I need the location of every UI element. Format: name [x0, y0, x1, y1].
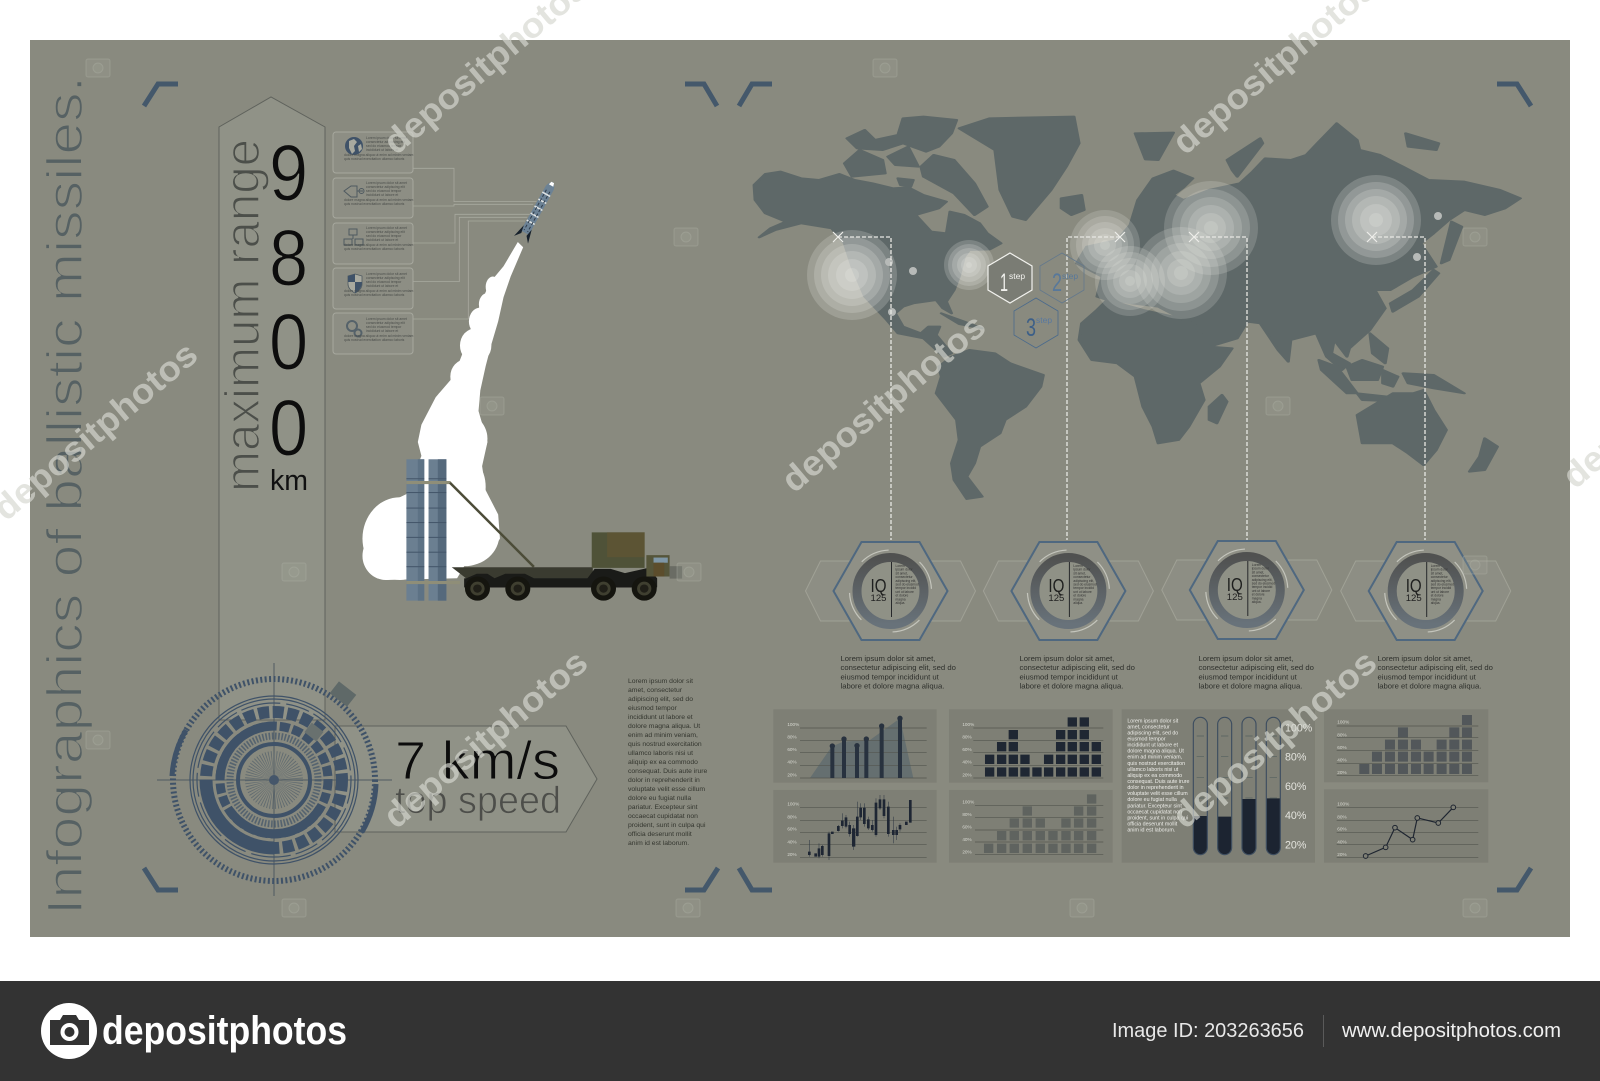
IQ widget 2: magna: [1073, 597, 1084, 601]
watermarks: depositphotos: [774, 306, 993, 500]
IQ widget 3: aliqua.: [1252, 600, 1262, 604]
widget captions: Lorem ipsum dolor sit amet,: [1198, 654, 1293, 663]
IQ widget 4: et dolore: [1431, 594, 1444, 598]
IQ widget 4: ipsum dolor: [1431, 568, 1449, 572]
dashed leader lines: [838, 237, 1425, 540]
IQ widget 3: Lorem: [1252, 563, 1261, 567]
step 1 hexagon: 1: [1000, 269, 1008, 297]
IQ widget 1: tempor incidid: [896, 586, 916, 590]
panel: thermometers: voluptate velit esse cillum: [1127, 791, 1188, 797]
Indonesia and Philippines: [1319, 360, 1357, 393]
chart: line: 80%: [1337, 814, 1347, 819]
step 1 hexagon: step: [1009, 271, 1025, 281]
box text: quis nostrud exercitation ullamco laboris: [344, 338, 405, 342]
middle text column: aliquip ex ea commodo: [628, 759, 698, 766]
IQ widget 3: tempor incidid: [1252, 585, 1272, 589]
IQ widget 2: 125: [1048, 593, 1064, 604]
panel: maximum range arrow: [216, 97, 325, 720]
chart: dark block columns: 40%: [962, 760, 972, 765]
Kamchatka and Japan: [1441, 222, 1462, 263]
strike zone 1: [807, 230, 897, 320]
chart: candlesticks: 20%: [787, 852, 797, 857]
widget captions: labore et dolore magna aliqua.: [1198, 682, 1302, 691]
step 3 hexagon: step: [1036, 315, 1052, 325]
IQ widget 1: Lorem: [896, 564, 905, 568]
chart: candlesticks: 100%: [787, 802, 799, 807]
box text: quis nostrud exercitation ullamco laboris: [344, 293, 405, 297]
panel: thermometers: occaecat cupidatat non: [1127, 809, 1182, 815]
chart: grey block columns top: 20%: [1337, 770, 1347, 775]
panel: thermometers: quis nostrud exercitation: [1127, 761, 1185, 767]
widget captions: eiusmod tempor incididunt ut: [1198, 672, 1298, 681]
missile launcher truck: [406, 459, 682, 601]
chart: candlesticks: 60%: [787, 827, 797, 832]
panel: thermometers: aliquip ex ea commodo: [1127, 773, 1182, 779]
IQ widget 4: magna: [1431, 597, 1441, 601]
IQ widget 1: aliqua.: [896, 601, 905, 605]
box text: consectetur adipiscing elit: [366, 321, 405, 325]
chart: line: 20%: [1337, 852, 1347, 857]
IQ widget 1: consectetur: [896, 575, 913, 579]
strike zone 6: [1164, 181, 1258, 275]
icon: network: [344, 229, 363, 245]
IQ widget 1: sit amet,: [896, 571, 908, 575]
chart: bars with area: 40%: [787, 760, 797, 765]
box text: incididunt ut labore et: [366, 148, 398, 152]
chart: candlesticks: 80%: [787, 814, 797, 819]
panel: thermometers: dolore magna aliqua. Ut: [1127, 749, 1184, 755]
box text: Lorem ipsum dolor sit amet: [366, 136, 407, 140]
chart: grey block columns: 100%: [962, 799, 974, 804]
IQ widget 3: [1162, 532, 1332, 648]
connector lines to missile: [413, 168, 537, 319]
panel: thermometers: pariatur. Excepteur sint: [1127, 803, 1182, 809]
info boxes: [333, 132, 414, 354]
chart: grey block columns top: 40%: [1337, 758, 1347, 763]
chart: bars with area: 60%: [787, 747, 797, 752]
IQ widget 2: ipsum dolor: [1073, 568, 1091, 572]
number: 9800 km: 0: [269, 383, 308, 472]
step 1 hexagon: [988, 253, 1032, 303]
panel: thermometers: eiusmod tempor: [1127, 737, 1166, 743]
box text: sed do eiusmod tempor: [366, 144, 402, 148]
chart: bars with area: 100%: [787, 722, 799, 727]
Caribbean: [941, 313, 982, 328]
box text: sed do eiusmod tempor: [366, 325, 402, 329]
panel: thermometers: incididunt ut labore et: [1127, 743, 1179, 749]
speed label: top speed: [395, 780, 561, 822]
launch tubes: [406, 459, 460, 601]
Madagascar: [1209, 395, 1227, 423]
middle text column: dolore magna aliqua. Ut: [628, 723, 700, 730]
footer image id: Image ID: 203263656: [1112, 1020, 1304, 1042]
chart: bars with area: 20%: [787, 772, 797, 777]
Eurasia: [1077, 123, 1520, 370]
corner brackets: [144, 84, 1531, 890]
chart: dark block columns: 80%: [962, 735, 972, 740]
middle text column: amet, consectetur: [628, 687, 683, 694]
chart: grey block columns: 60%: [962, 824, 972, 829]
box text: dolore magna aliqua ut enim ad minim veniam: [344, 153, 414, 157]
wheels: [465, 577, 657, 601]
widget captions: Lorem ipsum dolor sit amet,: [840, 654, 935, 663]
panel: thermometers: anim id est laborum.: [1127, 828, 1175, 834]
IQ widget 4: unt ut labore: [1431, 590, 1449, 594]
widget captions: eiusmod tempor incididunt ut: [1378, 672, 1477, 681]
chart: line: [1324, 789, 1488, 863]
panel: thermometers: 20%: [1285, 839, 1307, 851]
middle text column: occaecat cupidatat non: [628, 813, 698, 820]
box text: consectetur adipiscing elit: [366, 140, 405, 144]
middle text column: consequat. Duis aute irure: [628, 768, 708, 775]
box text: incididunt ut labore et: [366, 329, 398, 333]
IQ widget 1: 125: [870, 593, 886, 604]
middle text column: voluptate velit esse cillum: [628, 786, 705, 793]
Greenland: [959, 117, 1079, 220]
widget captions: eiusmod tempor incididunt ut: [1020, 672, 1119, 681]
middle text column: officia deserunt mollit: [628, 831, 692, 838]
IQ widget 2: unt ut labore: [1073, 590, 1092, 594]
chart: grey block columns: 80%: [962, 812, 972, 817]
panel: thermometers: dolore eu fugiat nulla: [1127, 797, 1177, 803]
box text: dolore magna aliqua ut enim ad minim veniam: [344, 334, 414, 338]
box text: consectetur adipiscing elit: [366, 230, 405, 234]
target crosses: [833, 232, 1377, 242]
chart: dark block columns: 60%: [962, 747, 972, 752]
chart: line: 60%: [1337, 827, 1347, 832]
IQ widget 4: adipiscing elit,: [1431, 579, 1451, 583]
IQ widget 2: adipiscing elit,: [1073, 579, 1094, 583]
smoke plume: [362, 242, 523, 580]
IQ widget 4: consectetur: [1431, 575, 1449, 579]
vertical title: Infographics of ballistic missiles.: [37, 76, 93, 915]
charts left group: [773, 709, 1113, 863]
watermarks: depositphotos: [1165, 642, 1384, 836]
label: maximum range: maximum range: [216, 139, 270, 492]
step 3 hexagon: [1014, 298, 1058, 348]
IQ widget 3: unt ut labore: [1252, 589, 1270, 593]
IQ widget 3: consectetur: [1252, 574, 1270, 578]
IQ widget 4: Lorem: [1431, 564, 1440, 568]
strike zone 2: [944, 240, 994, 290]
box text: Lorem ipsum dolor sit amet: [366, 317, 407, 321]
number: 9800 km: 9: [269, 128, 308, 217]
widget captions: consectetur adipiscing elit, sed do: [1020, 663, 1135, 672]
panel: thermometers: amet, consectetur: [1127, 724, 1170, 730]
middle text column: anim id est laborum.: [628, 840, 689, 847]
number: 9800 km: [269, 128, 308, 497]
box text: incididunt ut labore et: [366, 238, 398, 242]
box text: Lorem ipsum dolor sit amet: [366, 272, 407, 276]
IQ widget 1: et dolore: [896, 594, 908, 598]
chart: line: 40%: [1337, 839, 1347, 844]
chart: grey block columns top: [1324, 709, 1488, 782]
IQ widget 2: aliqua.: [1073, 601, 1083, 605]
step 2 hexagon: 2: [1052, 269, 1062, 297]
chart: grey block columns: [949, 790, 1113, 863]
icon: plug: [344, 186, 364, 197]
step 2 hexagon: step: [1062, 271, 1078, 281]
Australia: [1357, 390, 1446, 465]
New Zealand: [1469, 438, 1497, 472]
panel: thermometers: 100%: [1285, 722, 1313, 734]
footer logo: depositphotos: [102, 1009, 347, 1053]
panel: thermometers: Lorem ipsum dolor sit: [1127, 718, 1178, 724]
Iceland: [1061, 195, 1084, 215]
footer logo: [41, 1003, 347, 1059]
chart: dark block columns: 20%: [962, 772, 972, 777]
widget captions: consectetur adipiscing elit, sed do: [1198, 663, 1314, 672]
radar gauge: [157, 663, 392, 896]
IQ widget 2: sit amet,: [1073, 571, 1086, 575]
North America: [754, 172, 1001, 357]
panel: thermometers: 60%: [1285, 781, 1307, 793]
speed arrow panel: [335, 726, 597, 832]
step 3 hexagon: 3: [1026, 314, 1036, 342]
IQ widget 3: adipiscing elit,: [1252, 578, 1273, 582]
IQ widget 3: sit amet,: [1252, 570, 1264, 574]
footer url: www.depositphotos.com: [1341, 1020, 1561, 1042]
chart: grey block columns: 40%: [962, 837, 972, 842]
truck body: [452, 532, 682, 588]
chart: grey block columns: 20%: [962, 849, 972, 854]
chart: grey block columns top: 80%: [1337, 732, 1347, 737]
middle text column: pariatur. Excepteur sint: [628, 804, 698, 811]
number: 9800 km: km: [270, 465, 308, 497]
box text: sed do eiusmod tempor: [366, 280, 402, 284]
speed value: 7 km/s: [395, 731, 560, 791]
IQ widget 2: et dolore: [1073, 594, 1086, 598]
widget captions: consectetur adipiscing elit, sed do: [840, 663, 956, 672]
box text: consectetur adipiscing elit: [366, 276, 405, 280]
Arctic Russia islands: [1135, 133, 1173, 160]
widget captions: labore et dolore magna aliqua.: [840, 682, 944, 691]
IQ widget 3: et dolore: [1252, 593, 1265, 597]
panel: thermometers: ullamco laboris nisi ut: [1127, 767, 1179, 773]
middle text column: eiusmod tempor: [628, 705, 677, 712]
panel: thermometers: enim ad minim veniam,: [1127, 755, 1182, 761]
IQ widget 1: unt ut labore: [896, 590, 914, 594]
IQ widget 4: [1341, 533, 1511, 649]
IQ widget 1: sed do eiusmod: [896, 582, 919, 586]
panel: thermometers: proident, sunt in culpa qui: [1127, 815, 1188, 821]
chart: candlesticks: [773, 790, 937, 863]
strike zone 7: [1331, 175, 1421, 265]
box text: dolore magna aliqua ut enim ad minim veniam: [344, 198, 414, 202]
strike zone 4: [1095, 246, 1165, 316]
charts right group: [1122, 709, 1488, 863]
widget captions: Lorem ipsum dolor sit amet,: [1378, 654, 1472, 663]
IQ widget 4: aliqua.: [1431, 601, 1440, 605]
strike zone 3: [1070, 210, 1140, 280]
IQ widget 2: consectetur: [1073, 575, 1091, 579]
box text: [344, 136, 414, 342]
IQ widget 2: [983, 533, 1153, 649]
middle text column: quis nostrud exercitation: [628, 741, 702, 748]
box text: quis nostrud exercitation ullamco laboris: [344, 247, 405, 251]
IQ widget 1: ipsum dolor: [896, 568, 913, 572]
Africa: [1079, 300, 1232, 443]
middle text column: Lorem ipsum dolor sit: [628, 678, 693, 685]
South America: [936, 350, 1043, 499]
box text: Lorem ipsum dolor sit amet: [366, 181, 407, 185]
IQ widget 1: adipiscing elit,: [896, 579, 916, 583]
IQ widget 1: magna: [896, 597, 906, 601]
IQ widget 1: IQ: [870, 576, 886, 596]
icon: globe: [345, 137, 363, 155]
chart: grey block columns top: 60%: [1337, 745, 1347, 750]
box text: dolore magna aliqua ut enim ad minim veniam: [344, 289, 414, 293]
widget captions: [840, 654, 1493, 691]
widget captions: labore et dolore magna aliqua.: [1378, 682, 1481, 691]
middle text column: adipiscing elit, sed do: [628, 696, 693, 703]
middle text column: ullamco laboris nisi ut: [628, 750, 693, 757]
panel: thermometers: officia deserunt mollit: [1127, 821, 1178, 827]
panel: thermometers: [1122, 709, 1315, 863]
IQ widget 4: sed do eiusmod: [1431, 582, 1454, 586]
support strut: [450, 483, 534, 567]
background panel: [30, 40, 1570, 937]
box text: consectetur adipiscing elit: [366, 185, 405, 189]
IQ widget 3: magna: [1252, 596, 1262, 600]
box text: sed do eiusmod tempor: [366, 234, 402, 238]
IQ widget 4: IQ: [1406, 576, 1422, 596]
middle text column: proident, sunt in culpa qui: [628, 822, 706, 829]
IQ widget 2: IQ: [1048, 576, 1064, 596]
IQ widget 2: sed do eiusmod: [1073, 582, 1097, 586]
box text: incididunt ut labore et: [366, 284, 398, 288]
chart: line: 100%: [1337, 802, 1349, 807]
strike zone 5: [1135, 227, 1227, 319]
panel: thermometers: dolor in reprehenderit in: [1127, 785, 1184, 791]
chart: candlesticks: 40%: [787, 839, 797, 844]
watermarks: [0, 0, 1600, 836]
widget captions: consectetur adipiscing elit, sed do: [1378, 663, 1493, 672]
small target dots: [885, 212, 1442, 316]
chart: dark block columns: 100%: [962, 722, 974, 727]
IQ widget 1: [806, 533, 976, 649]
box text: Lorem ipsum dolor sit amet: [366, 226, 407, 230]
world map: [754, 117, 1520, 499]
IQ widget 4: 125: [1406, 593, 1422, 604]
number: 9800 km: 0: [269, 297, 308, 386]
watermark camera marks: [86, 59, 1487, 917]
middle text column: enim ad minim veniam,: [628, 732, 698, 739]
widget captions: Lorem ipsum dolor sit amet,: [1020, 654, 1114, 663]
chart: dark block columns: [949, 709, 1113, 783]
box text: incididunt ut labore et: [366, 193, 398, 197]
IQ widget 3: IQ: [1227, 575, 1243, 595]
Arctic islands: [847, 117, 957, 152]
panel: thermometers: 80%: [1285, 752, 1307, 764]
chart: grey block columns top: 100%: [1337, 720, 1349, 725]
middle text column: incididunt ut labore et: [628, 714, 693, 721]
chart: bars with area: [773, 709, 937, 783]
icon: shield: [348, 274, 362, 293]
IQ widget 2: Lorem: [1073, 564, 1083, 568]
panel: thermometers: consequat. Duis aute irure: [1127, 779, 1190, 785]
IQ widget 4: sit amet,: [1431, 571, 1443, 575]
middle text column: dolore eu fugiat nulla: [628, 795, 691, 802]
panel: thermometers: adipiscing elit, sed do: [1127, 730, 1178, 736]
panel: thermometers: 40%: [1285, 810, 1307, 822]
icon: gears: [347, 321, 362, 336]
watermarks: depositphotos: [376, 642, 595, 836]
IQ widget 2: tempor incidid: [1073, 586, 1094, 590]
chart: bars with area: 80%: [787, 735, 797, 740]
middle text column: dolor in reprehenderit in: [628, 777, 700, 784]
IQ widget 3: sed do eiusmod: [1252, 582, 1275, 586]
missile: [514, 178, 560, 244]
box text: quis nostrud exercitation ullamco laboris: [344, 157, 405, 161]
box text: dolore magna aliqua ut enim ad minim veniam: [344, 243, 414, 247]
step 2 hexagon: [1040, 253, 1084, 303]
strike zones: [807, 175, 1442, 320]
IQ widget 4: tempor incidid: [1431, 586, 1451, 590]
box text: quis nostrud exercitation ullamco laboris: [344, 202, 405, 206]
number: 9800 km: 8: [269, 213, 308, 302]
IQ widget 3: 125: [1227, 592, 1243, 603]
IQ widget 3: ipsum dolor: [1252, 567, 1270, 571]
widget captions: labore et dolore magna aliqua.: [1020, 682, 1123, 691]
footer bar: [0, 981, 1600, 1081]
widget captions: eiusmod tempor incididunt ut: [840, 672, 940, 681]
box text: sed do eiusmod tempor: [366, 189, 402, 193]
